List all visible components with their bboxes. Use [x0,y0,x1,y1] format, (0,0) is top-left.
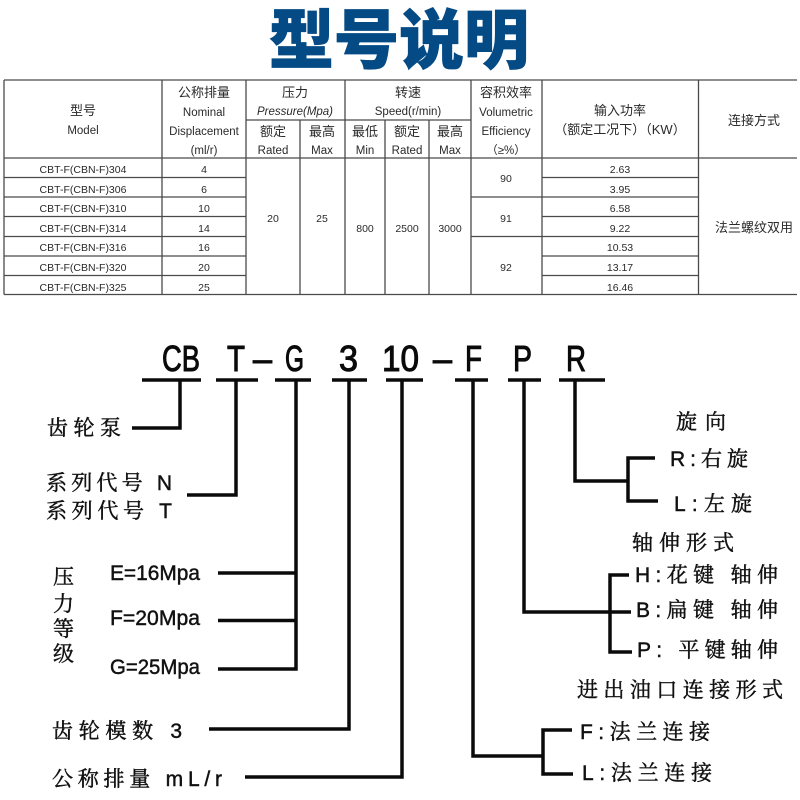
panel: specification table: Pressure(Mpa) [257,106,333,118]
right labels: 进出油口连接形式 [577,679,783,702]
left labels: 齿轮模数 3 [52,720,182,743]
panel: specification table: 转速 [395,85,421,100]
panel: specification table: 最低 [352,124,378,139]
model code letters: F [465,338,482,379]
panel: specification table: 额定 [394,124,420,139]
left labels: 系列代号 T [46,500,172,523]
panel: specification table: 2500 [395,223,419,235]
panel: specification table: CBT-F(CBN-F)306 [40,184,127,196]
panel: specification table: 法兰螺纹双用 [715,220,793,235]
left labels: 级 [53,643,74,666]
model code letters: – [433,338,452,379]
panel: specification table: 型号 [70,103,96,118]
panel: specification table: Max [311,145,333,157]
connector lines [132,380,658,777]
panel: specification table: 25 [316,213,328,225]
panel: specification table: 连接方式 [728,113,780,128]
panel: specification table: （≥%） [486,144,526,157]
panel: specification table: 90 [500,173,512,185]
panel: specification table: Volumetric [479,107,533,119]
right labels: B:扁键 轴伸 [636,599,778,622]
left labels: 公称排量 mL/r [52,768,222,791]
panel: specification table: Min [356,145,374,157]
panel: specification table: CBT-F(CBN-F)310 [40,203,127,215]
panel: specification table: 91 [500,213,512,225]
left labels: 齿轮泵 [47,417,121,440]
panel: specification table: 容积效率 [480,85,532,100]
model code letters: 10 [382,338,419,379]
panel: specification table: 92 [500,262,512,274]
panel: specification table: 14 [198,223,210,235]
panel: specification table: 800 [356,223,374,235]
left labels: E=16Mpa [110,562,200,585]
model code letters [162,338,586,379]
left labels: 系列代号 N [46,472,172,495]
left labels: 等 [53,618,74,641]
panel: specification table: 公称排量 [178,85,230,100]
panel: specification table: Rated [258,145,288,157]
right labels: P: 平键轴伸 [637,639,778,662]
panel: specification table: 6.58 [610,203,630,215]
panel: specification table: CBT-F(CBN-F)320 [40,262,127,274]
panel: specification table: 4 [201,164,207,176]
panel: specification table: 10.53 [607,242,633,254]
panel: specification table: Speed(r/min) [375,106,441,118]
panel: specification table: CBT-F(CBN-F)314 [40,223,127,235]
right labels: 轴伸形式 [632,532,734,555]
panel: specification table: 20 [267,213,279,225]
left labels: G=25Mpa [110,656,200,679]
panel: specification table: 20 [198,262,210,274]
panel: specification table: 压力 [282,85,308,100]
panel: specification table: Displacement [169,126,240,138]
left labels: 力 [53,593,74,616]
panel: specification table: 16 [198,242,210,254]
panel: specification table: 最高 [309,124,335,139]
panel: specification table: CBT-F(CBN-F)316 [40,242,127,254]
panel: specification table: 3.95 [610,184,630,196]
right labels [577,411,783,785]
panel: specification table: CBT-F(CBN-F)304 [40,164,127,176]
right labels: F:法兰连接 [580,721,711,744]
right labels: L:法兰连接 [582,762,713,785]
left labels: F=20Mpa [110,607,200,630]
model code letters: G [285,338,304,379]
panel: specification table: 16.46 [607,282,633,294]
panel: specification table: Rated [392,145,422,157]
left labels [46,417,222,791]
right labels: R:右旋 [670,448,748,471]
model code letters: – [253,338,272,379]
panel: specification table: 输入功率 [594,103,646,118]
panel: specification table: 13.17 [607,262,633,274]
panel: specification table: 2.63 [610,164,630,176]
panel: specification table: 额定 [260,124,286,139]
panel: specification table: （额定工况下）（KW） [554,122,686,137]
panel: specification table: 6 [201,184,207,196]
panel: specification table: (ml/r) [191,145,218,157]
left labels: 压 [53,566,74,589]
panel: specification table: Max [439,145,461,157]
right labels: H:花键 轴伸 [635,564,778,587]
model code letters: R [566,338,586,379]
panel: specification table: Model [67,125,99,137]
model code letters: CB [162,338,200,379]
panel: specification table: 3000 [438,223,462,235]
model code letters: 3 [339,338,358,379]
panel: specification table: CBT-F(CBN-F)325 [40,282,127,294]
panel: specification table [4,80,797,294]
panel: specification table: 9.22 [610,223,630,235]
right labels: 旋向 [676,411,726,434]
right labels: L:左旋 [674,493,752,516]
panel: specification table: 25 [198,282,210,294]
model code letters: T [227,338,245,379]
panel: specification table: Efficiency [481,126,531,138]
panel: specification table: Nominal [183,107,225,119]
model code letters: P [513,338,532,379]
panel: specification table: 10 [198,203,210,215]
panel: specification table: 最高 [437,124,463,139]
